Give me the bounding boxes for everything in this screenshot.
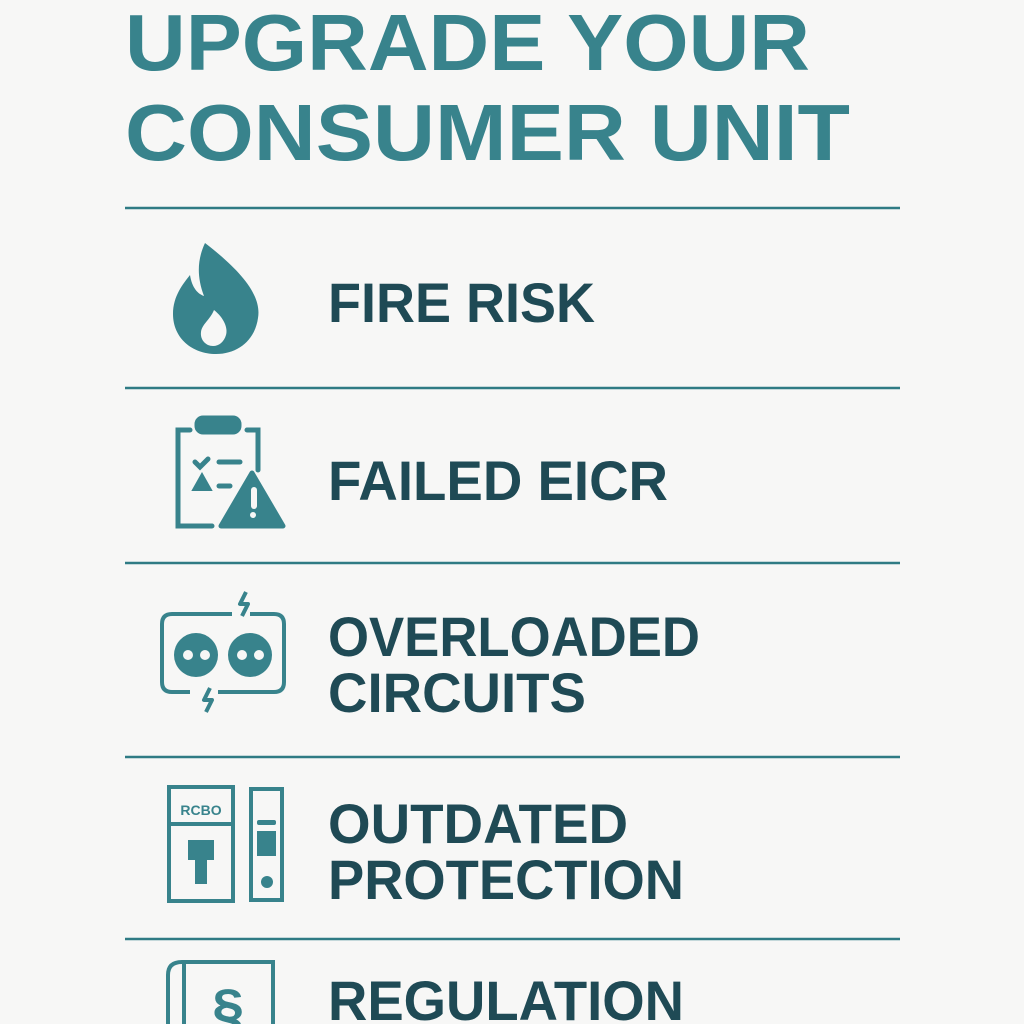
title <box>125 0 850 177</box>
icon: overloaded sockets <box>162 592 284 712</box>
icon: flame <box>173 243 258 354</box>
text: PROTECTION <box>328 848 684 911</box>
text: CIRCUITS <box>328 661 586 724</box>
icon: clipboard with warning <box>178 418 283 526</box>
title: CONSUMER UNIT <box>125 88 850 177</box>
label: failed eicr: FAILED EICR <box>328 449 668 512</box>
icon: regulation book <box>168 962 273 1024</box>
label: outdated protection: OUTDATED <box>328 792 628 855</box>
title: UPGRADE YOUR <box>125 0 810 87</box>
icon: RCBO breaker <box>169 787 282 901</box>
label: fire risk: FIRE RISK <box>328 271 595 334</box>
icon: RCBO breaker: RCBO <box>180 802 222 818</box>
label: overloaded circuits: OVERLOADED <box>328 605 700 668</box>
